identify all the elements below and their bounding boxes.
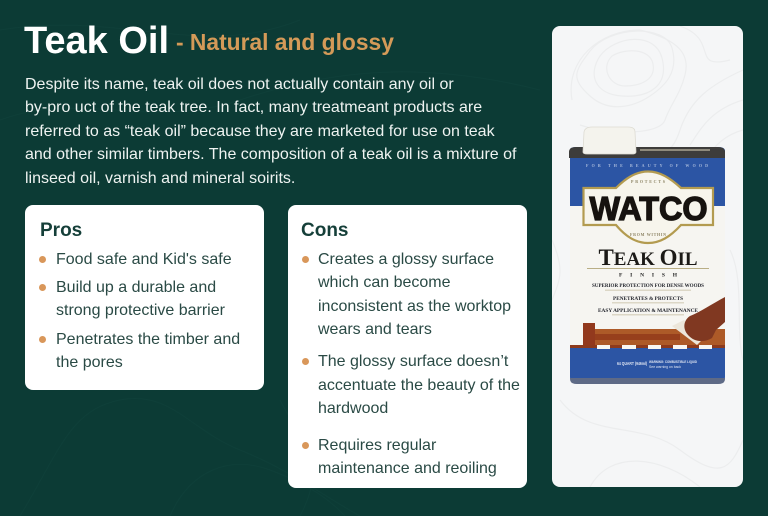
- intro paragraph: Despite its name, teak oil does not actually contain any oil or: [25, 76, 454, 93]
- panel: cons: [288, 205, 527, 488]
- can body: [570, 147, 725, 383]
- can top rim: [569, 147, 725, 158]
- heading: pros: Pros: [40, 220, 82, 241]
- logo wordmark: WATCO: [590, 190, 708, 227]
- photo background contours: [552, 26, 743, 487]
- cons item 2: The glossy surface doesn’t: [318, 353, 508, 370]
- tagline on blue band: FOR THE BEAUTY OF WOOD: [586, 163, 708, 168]
- product claims: [592, 283, 704, 314]
- intro paragraph: [25, 76, 516, 186]
- cons item 1: which can become: [318, 274, 451, 291]
- pros item 3: Penetrates the timber and: [56, 331, 240, 348]
- pros item 2: [39, 279, 225, 319]
- cons item 1: inconsistent as the worktop: [318, 298, 511, 315]
- pros item 2: Build up a durable and: [56, 279, 216, 296]
- product claims: EASY APPLICATION & MAINTENANCE: [598, 308, 698, 314]
- cons item 2: [302, 353, 520, 417]
- intro paragraph: referred to as “teak oil” because they are marketed for use on teak: [25, 123, 495, 140]
- title: - Natural and glossy: [176, 29, 394, 55]
- cons item 1: [302, 251, 511, 338]
- logo small text: PROTECTS: [631, 179, 666, 184]
- cons item 1: Creates a glossy surface: [318, 251, 494, 268]
- product claims: PENETRATES & PROTECTS: [613, 296, 683, 302]
- cons item 2: accentuate the beauty of the: [318, 377, 520, 394]
- icon: teak oil can: [569, 127, 725, 384]
- intro paragraph: by-pro uct of the teak tree. In fact, many treatmeant products are: [25, 99, 482, 116]
- icon: teak oil can: WARNING: COMBUSTIBLE LIQUID: [649, 360, 697, 364]
- cons item 1: wears and tears: [318, 321, 432, 338]
- intro paragraph: linseed oil, varnish and mineral soirits.: [25, 170, 295, 186]
- panel: pros: [25, 205, 264, 390]
- white label: [570, 206, 725, 347]
- title: [24, 20, 394, 62]
- cons item 3: [302, 436, 497, 476]
- heading: cons: Cons: [301, 220, 348, 241]
- cons item 3: Requires regular: [318, 436, 436, 454]
- cons item 3: maintenance and reoiling: [318, 460, 497, 476]
- logo plaque: [584, 172, 713, 243]
- cloth and hand: [672, 297, 725, 345]
- product claims: SUPERIOR PROTECTION FOR DENSE WOODS: [592, 283, 704, 289]
- icon: teak oil can: See warning on back: [649, 365, 681, 369]
- product name: TEAK OIL: [598, 245, 698, 270]
- intro paragraph: and other similar timbers. The composition of a teak oil is a mixture of: [25, 146, 516, 163]
- pros item 2: strong protective barrier: [56, 302, 225, 319]
- can cap: [583, 127, 636, 154]
- finish label: FINISH: [619, 272, 678, 278]
- bottom rim: [570, 378, 725, 384]
- bottom label text: 64 QUART (946ml): [617, 361, 647, 366]
- cons item 2: hardwood: [318, 400, 388, 417]
- wooden bench illustration: [570, 323, 725, 349]
- title: Teak Oil: [24, 20, 169, 62]
- icon: teak oil can: FROM WITHIN: [630, 232, 666, 237]
- pros item 3: [39, 331, 240, 371]
- panel: product photo: [552, 26, 743, 487]
- pros item 3: the pores: [56, 354, 123, 371]
- pros item 1: Food safe and Kid's safe: [56, 251, 232, 268]
